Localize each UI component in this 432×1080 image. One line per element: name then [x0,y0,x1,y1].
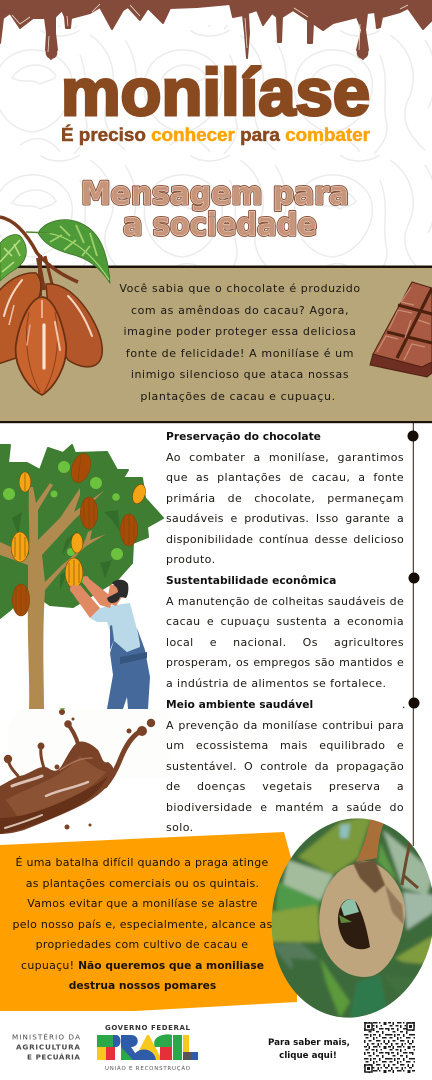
chocolate drip border [0,0,432,59]
text block: meio ambiente saudável: . [402,698,406,711]
text block: banner message [119,282,361,402]
call to action: clique aqui! [279,1051,337,1061]
ministério logo [12,1032,80,1062]
text block: banner message: Você sabia que o chocolate é produzido [119,282,361,295]
text block: meio ambiente saudável: de doenças vegetais preserva a [166,780,404,793]
icon: chocolate bar [370,282,432,377]
text block: sustentabilidade econômica: prosperam, os empregos são mantidos e [166,656,404,669]
panel: orange callout [0,832,297,1011]
text block: meio ambiente saudável: A prevenção da monilíase contribui para [166,718,404,732]
text block: preservação do chocolate [166,430,404,566]
title: monilíase [61,55,370,129]
text block: orange callout: destrua nossos pomares [69,979,216,992]
heading: mensagem para a sociedade: a sociedade [123,207,317,243]
text block: sustentabilidade econômica [166,574,404,690]
heading: preservação: Preservação do chocolate [166,430,321,443]
text block: banner message: imagine poder proteger essa deliciosa [124,325,356,338]
illustration: cocoa tree [0,445,163,709]
text block: orange callout: as plantações comerciais ou os quintais. [26,876,259,890]
timeline line [412,423,414,846]
text block: orange callout: pelo nosso país e, especialmente, alcance as [12,918,273,930]
illustration: chocolate splash [0,708,170,834]
ministério logo: MINISTÉRIO DA [12,1032,80,1042]
text block: meio ambiente saudável: solo. [166,821,194,834]
panel: sociedade banner [0,266,432,423]
QR code [364,1022,415,1073]
text block: preservação do chocolate: saudáveis e produtivas. Isso garante a [166,512,404,525]
ministério logo: AGRICULTURA [16,1042,80,1052]
text block: preservação do chocolate: que as plantações de cacau, a fonte [166,471,404,484]
subtitle: É preciso conhecer para combater [61,124,370,145]
text block: banner message: plantações de cacau e cupuaçu. [140,390,336,402]
text block: banner message: com as amêndoas do cacau? Agora, [131,304,349,316]
photo: diseased fruit [272,818,432,1018]
heading: mensagem para a sociedade [81,176,349,243]
heading: mensagem para a sociedade: Mensagem para [81,176,349,212]
text block: preservação do chocolate: primária de chocolate, permaneçam [166,492,404,504]
text block: meio ambiente saudável [166,698,406,834]
text block: preservação do chocolate: Ao combater a monilíase, garantimos [166,450,404,464]
text block: orange callout: propriedades com cultivo de cacau e [36,938,248,951]
text block: orange callout: É uma batalha difícil quando a praga atinge [15,856,269,869]
heading: mensagem para a sociedade: Mensagem para [81,176,349,212]
text block: sustentabilidade econômica: cacau e cupuaçu sustenta a economia [166,615,404,628]
text block: orange callout: Vamos evitar que a monilíase se alastre [27,897,258,910]
governo federal logo: GOVERNO FEDERAL [105,1024,191,1032]
text block: meio ambiente saudável: sustentável. O controle da propagação [166,760,404,772]
text block: meio ambiente saudável: um ecossistema mais equilibrado e [166,739,404,752]
timeline dots [408,430,420,708]
text block: preservação do chocolate: produto. [166,553,216,566]
governo federal logo [97,1024,198,1072]
text block: preservação do chocolate: disponibilidade contínua desse delicioso [166,532,404,546]
governo federal logo: UNIÃO E RECONSTRUÇÃO [105,1065,190,1072]
call to action: Para saber mais, [268,1038,350,1048]
text block: orange callout [12,856,273,992]
text block: sustentabilidade econômica: a indústria de alimentos se fortalece. [166,676,386,690]
heading: sustentabilidade: Sustentabilidade econômica [166,574,336,587]
background pattern [0,25,432,267]
text block: sustentabilidade econômica: A manutenção de colheitas saudáveis de [166,594,404,608]
text block: orange callout: cupuaçu! Não queremos que a moniliase [21,958,264,972]
text block: banner message: inimigo silencioso que ataca nossas [131,368,349,381]
call to action [268,1038,350,1061]
heading: meio ambiente: Meio ambiente saudável [166,698,313,711]
text block: meio ambiente saudável: biodiversidade e mantém a saúde do [166,800,404,814]
illustration: farmer [70,576,150,709]
text block: sustentabilidade econômica: local e nacional. Os agricultores [166,636,404,648]
heading: mensagem para a sociedade: a sociedade [123,207,317,243]
icon: cocoa pods with leaves [0,217,110,395]
text block: banner message: fonte de felicidade! A monilíase é um [126,346,354,360]
ministério logo: E PECUÁRIA [27,1052,80,1062]
